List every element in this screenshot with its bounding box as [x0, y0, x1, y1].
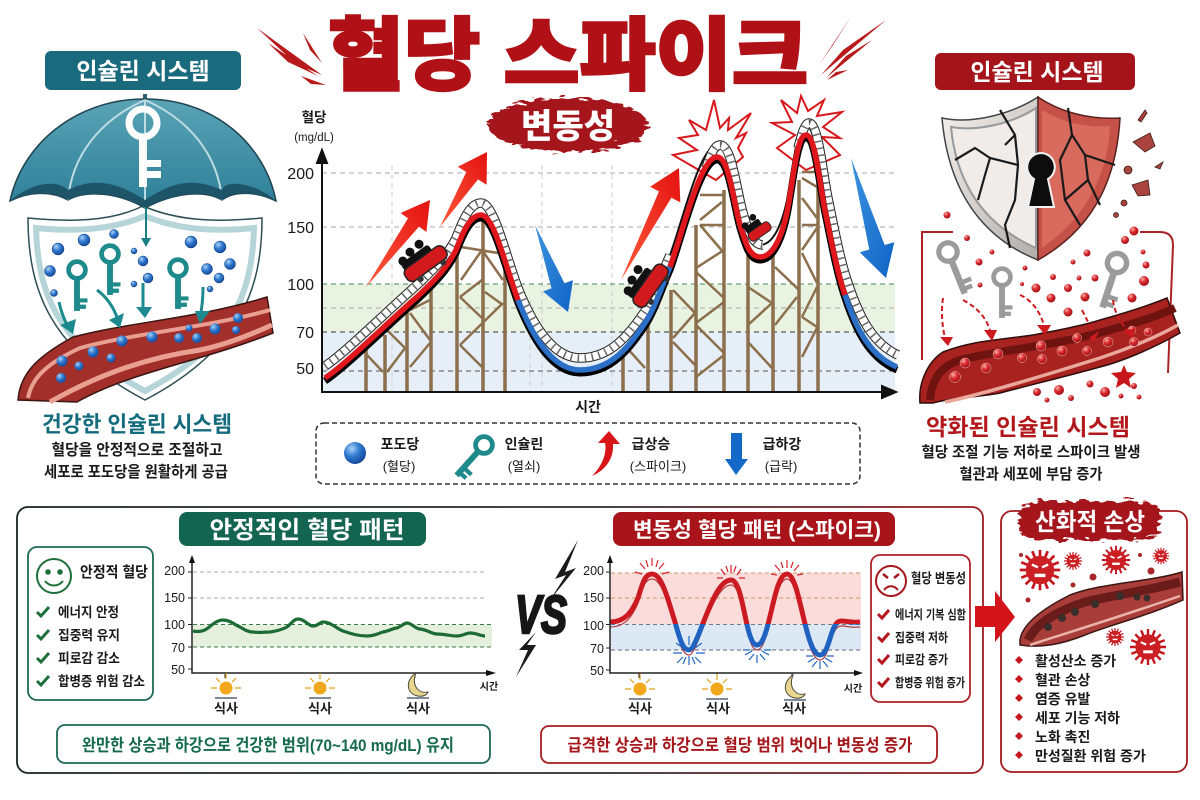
wooden supports: [366, 172, 818, 392]
legend fall arrow: 급하강: [763, 436, 801, 452]
meal labels variable: 시간: [844, 683, 862, 695]
main chart: [287, 96, 898, 415]
coaster car 1: [392, 230, 452, 288]
legend glucose: (혈당): [383, 459, 415, 474]
callout stable: 완만한 상승과 하강으로 건강한 범위(70~140 mg/dL) 유지: [82, 736, 454, 755]
starburst right peak: [772, 96, 842, 170]
curve thin offset: [610, 579, 860, 660]
title brush strokes left: [257, 28, 326, 85]
y labels variable: 200: [583, 564, 604, 578]
badge: left insulin system: 인슐린 시스템: [76, 58, 210, 84]
zone bands: [322, 284, 895, 392]
legend: [316, 423, 860, 484]
text: healthy description: 세포로 포도당을 원활하게 공급: [44, 463, 228, 481]
heading: weakened insulin system: 약화된 인슐린 시스템: [926, 414, 1130, 440]
meal labels stable: 식사: [406, 701, 430, 716]
meal labels variable: 식사: [706, 701, 730, 716]
checklist variable: 피로감 증가: [895, 652, 948, 667]
panel: healthy insulin illustration: [10, 94, 276, 402]
meal icons stable: [211, 673, 429, 698]
legend glucose: [344, 436, 419, 474]
legend fall arrow: (급락): [765, 459, 797, 474]
blue arrow 1: [535, 225, 573, 312]
vs lightning: [515, 540, 578, 677]
blood vessel: [18, 297, 273, 402]
shield healthy: [28, 206, 262, 400]
bursts high: [635, 558, 803, 578]
y labels variable: 50: [590, 664, 604, 678]
heading: stable pattern: 안정적인 혈당 패턴: [210, 517, 404, 544]
y labels variable: 150: [583, 591, 604, 605]
checklist stable: 에너지 안정: [58, 605, 119, 620]
chart: variable glucose: [583, 555, 863, 716]
damage list: 활성산소 증가: [1035, 653, 1116, 669]
umbrella with key: [10, 94, 276, 247]
checklist variable: 에너지 기복 심함: [895, 607, 966, 622]
damaged vessel: [920, 298, 1180, 403]
teal keys: [69, 246, 188, 311]
chart: stable glucose: [164, 555, 498, 716]
label stable glucose: 안정적 혈당: [80, 564, 148, 581]
y labels stable: 150: [164, 591, 185, 605]
meal labels stable: 식사: [214, 701, 238, 716]
coaster car 3: [739, 209, 773, 243]
glucose curve shadow: [325, 138, 897, 381]
y axis title: [294, 109, 334, 144]
panel: variable effects: [871, 555, 970, 702]
curve low blue: [610, 624, 860, 658]
legend insulin key: (열쇠): [508, 459, 540, 474]
vs lightning: VS: [515, 585, 567, 645]
y labels stable: 70: [171, 641, 185, 655]
coaster rail: [325, 123, 806, 366]
damage list: [1015, 653, 1146, 764]
meal labels variable: [628, 683, 862, 716]
y axis ticks: [287, 166, 314, 378]
damage list: 세포 기능 저하: [1035, 710, 1120, 726]
text: healthy description: 혈당을 안정적으로 조절하고: [52, 441, 222, 459]
shield fragments: [1114, 110, 1163, 218]
label variability: 혈당 변동성: [911, 570, 966, 586]
y axis title: (mg/dL): [294, 132, 334, 144]
glucose curve falling blue: [518, 267, 670, 370]
glucose curve end blue: [845, 295, 897, 367]
coaster car 2: [617, 252, 675, 313]
red arrow 1: [366, 200, 430, 287]
y axis ticks: 50: [296, 361, 314, 378]
glucose dots: [44, 230, 236, 296]
badge: left insulin system: [45, 51, 241, 90]
y axis ticks: 200: [287, 166, 314, 183]
heading: variable pattern: 변동성 혈당 패턴 (스파이크): [633, 519, 881, 542]
text: healthy description: [44, 441, 228, 481]
panel: weakened insulin illustration: [920, 97, 1180, 403]
starburst left peak: [673, 100, 751, 180]
variability blob: 변동성: [521, 108, 615, 146]
legend rise arrow: (스파이크): [630, 459, 686, 474]
red arrow 3: [621, 168, 680, 280]
checklist stable: 합병증 위험 감소: [58, 674, 145, 689]
banner: 산화적 손상: [1035, 509, 1145, 536]
y labels variable: 70: [590, 642, 604, 656]
checklist stable: 집중력 유지: [58, 628, 120, 643]
damage list: 노화 촉진: [1035, 729, 1090, 745]
virus icons: [1019, 546, 1169, 665]
bursts low: [673, 636, 834, 669]
badge: right insulin system: 인슐린 시스템: [970, 59, 1104, 85]
damage list: 만성질환 위험 증가: [1035, 748, 1146, 764]
vessel glucose: [56, 313, 243, 383]
burst star: [1111, 365, 1136, 388]
damaged vessel: [1020, 572, 1183, 646]
curve high red: [610, 572, 860, 624]
meal labels stable: [214, 681, 498, 716]
icon: angry face: [876, 566, 906, 596]
chart axes: [317, 150, 896, 398]
frame: [922, 232, 1173, 373]
checklist variable: [878, 607, 966, 690]
legend fall arrow: [725, 433, 801, 475]
damage list: 염증 유발: [1035, 691, 1091, 707]
arrow to damage: [975, 591, 1015, 642]
y axis ticks: 70: [296, 325, 314, 342]
meal labels stable: 시간: [480, 681, 498, 693]
x axis title: 시간: [575, 399, 601, 415]
meal icons variable: [625, 674, 806, 700]
glucose curve spike red: [670, 135, 845, 295]
panel: comparison frame: [17, 507, 983, 773]
dashed red arrows: [940, 295, 1136, 346]
legend rise arrow: 급상승: [632, 436, 670, 452]
y axis ticks: 150: [287, 220, 314, 237]
checklist variable: 집중력 저하: [895, 630, 948, 645]
callout stable: [57, 725, 490, 763]
coaster rail upper descents: [706, 123, 898, 355]
text: weakened description: 혈당 조절 기능 저하로 스파이크 발생: [922, 444, 1140, 461]
callout variable: 급격한 상승과 하강으로 혈당 범위 벗어나 변동성 증가: [568, 736, 913, 755]
title brush strokes right: [819, 15, 886, 80]
meal labels variable: 식사: [628, 701, 652, 716]
text: weakened description: 혈관과 세포에 부담 증가: [960, 466, 1103, 483]
meal labels variable: 식사: [782, 701, 806, 716]
callout variable: [541, 726, 937, 763]
heading: stable pattern: [179, 512, 426, 546]
panel: stable benefits: [28, 547, 153, 700]
legend glucose: 포도당: [381, 436, 419, 452]
y labels stable: [164, 564, 185, 677]
heading: healthy insulin system: 건강한 인슐린 시스템: [42, 412, 232, 437]
legend insulin key: 인슐린: [505, 436, 543, 452]
checklist variable: 합병증 위험 증가: [895, 675, 965, 690]
glucose curve rising red: [325, 215, 518, 378]
y labels stable: 200: [164, 564, 185, 578]
icon: smiley: [37, 559, 71, 593]
banner: [1018, 501, 1162, 540]
vessel glucose red: [950, 326, 1152, 382]
gray keys: [936, 239, 1131, 318]
cracked shield: [942, 97, 1120, 260]
y axis title: 혈당: [302, 109, 327, 125]
legend rise arrow: [592, 431, 686, 476]
checklist stable: [37, 605, 145, 689]
teal arrows: [59, 283, 210, 334]
badge: right insulin system: [935, 53, 1135, 90]
heading: variable pattern: [613, 512, 895, 546]
y labels variable: 100: [583, 619, 604, 633]
checklist stable: 피로감 감소: [58, 651, 120, 666]
y labels variable: [583, 564, 604, 678]
variability blob: [488, 98, 648, 152]
damage list: 혈관 손상: [1035, 672, 1091, 688]
text: weakened description: [922, 444, 1140, 483]
blue arrow 2: [851, 158, 894, 278]
red glucose dots: [944, 212, 1150, 402]
meal labels stable: 식사: [308, 701, 332, 716]
legend insulin key: [450, 433, 543, 482]
panel: oxidative damage: [975, 501, 1187, 772]
y labels stable: 50: [171, 663, 185, 677]
y axis ticks: 100: [287, 277, 314, 294]
red arrow 2: [440, 152, 487, 227]
y labels stable: 100: [164, 618, 185, 632]
